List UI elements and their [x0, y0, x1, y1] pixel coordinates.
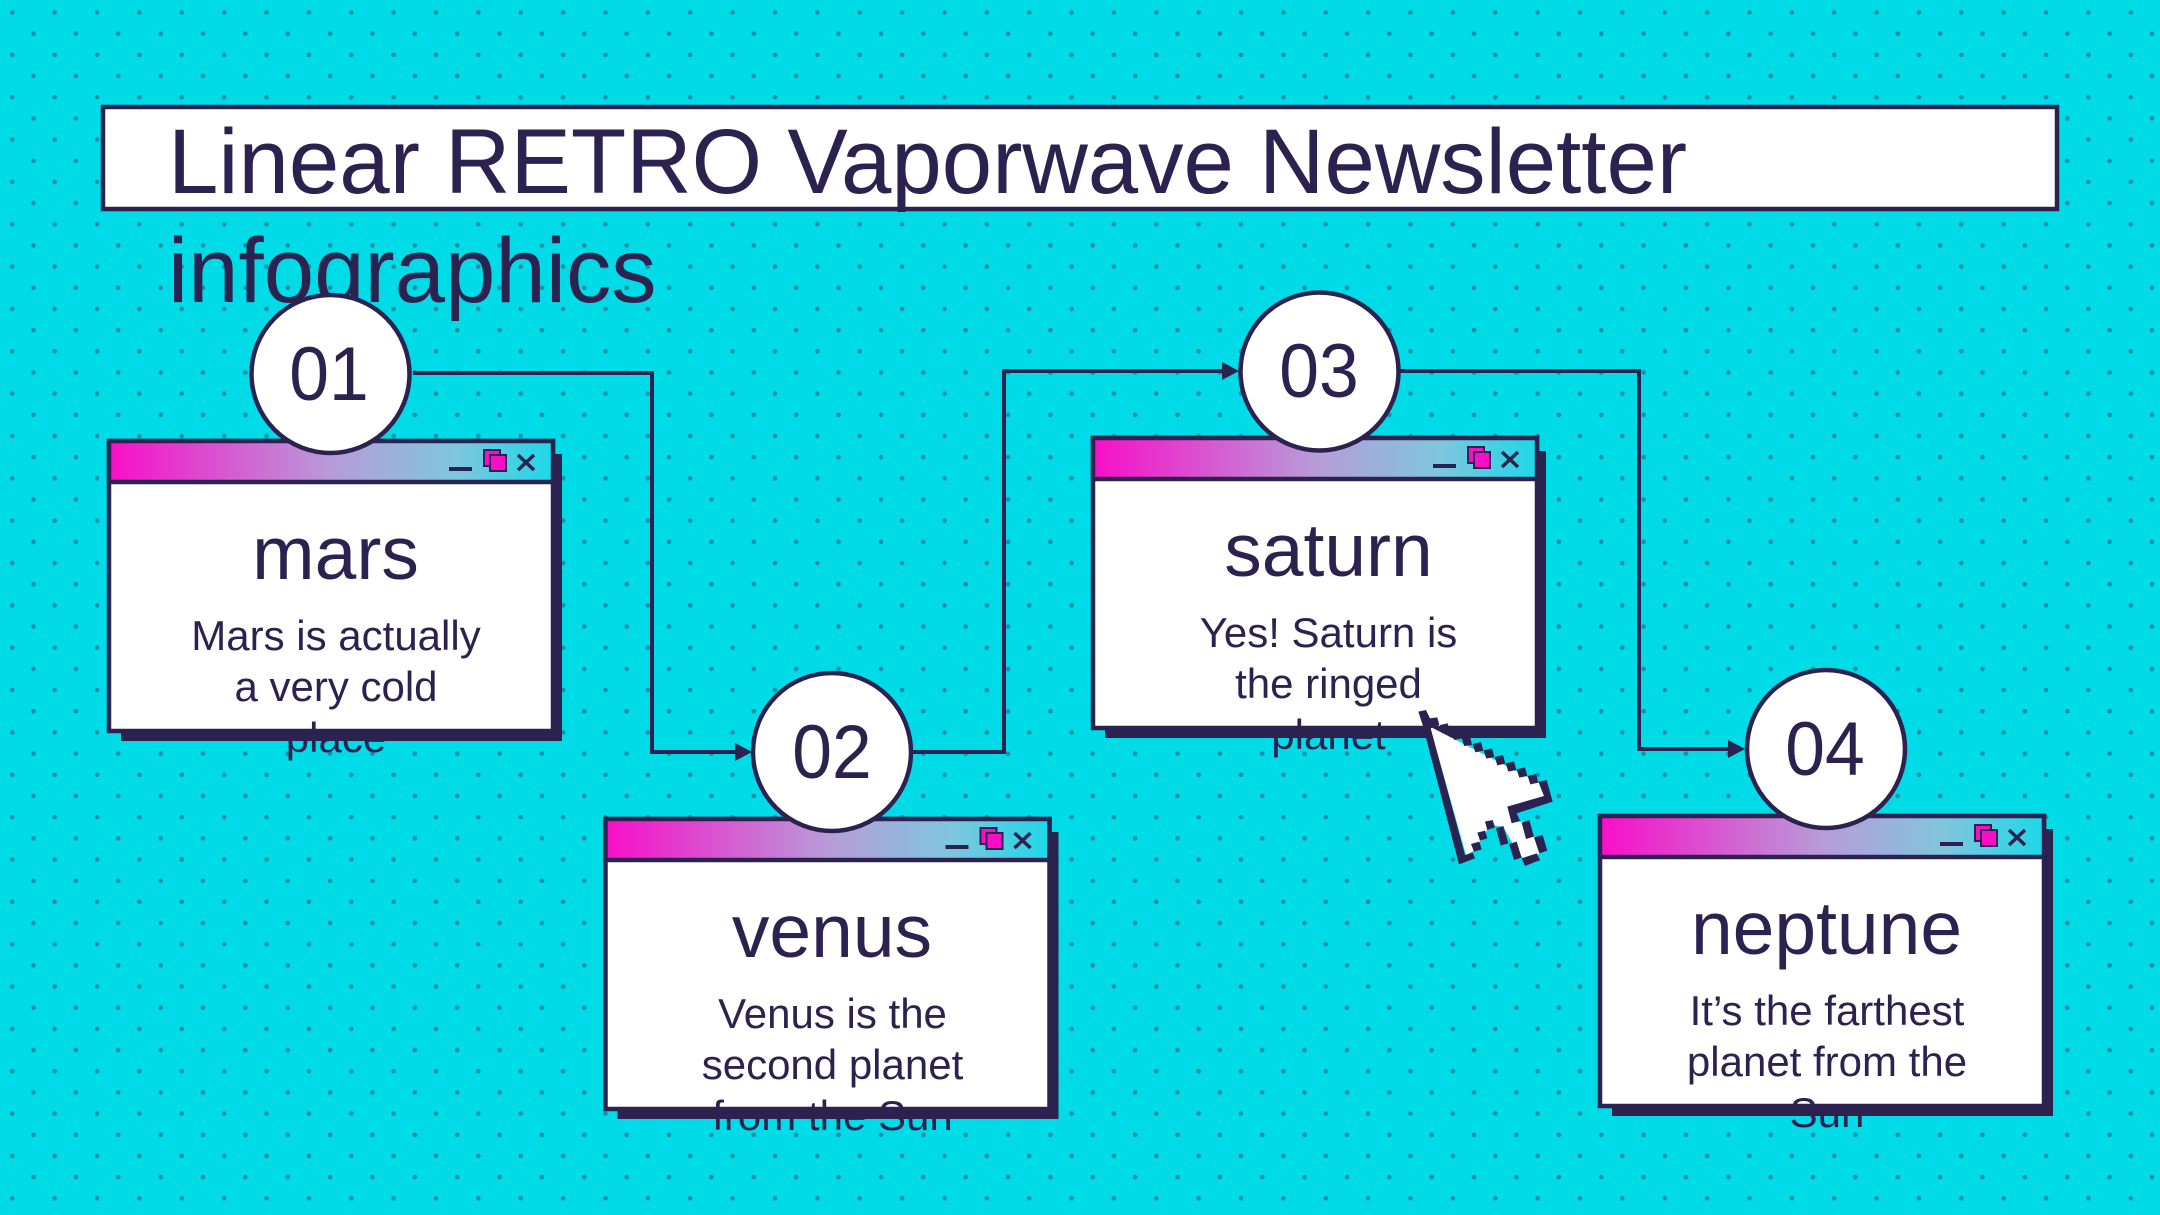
text: neptune description: planet from the	[1687, 1038, 1967, 1085]
window body	[1093, 438, 1537, 728]
number badge 01	[252, 295, 410, 453]
gradient title bar	[606, 819, 1050, 860]
panel: venus window	[606, 819, 1058, 1139]
heading: neptune: neptune	[1691, 886, 1962, 970]
heading: venus: venus	[732, 889, 932, 973]
window controls	[1433, 447, 1518, 468]
text: venus description: from the Sun	[712, 1092, 953, 1139]
text: neptune description: It’s the farthest	[1690, 987, 1964, 1034]
window body	[1600, 816, 2044, 1106]
text: venus description: Venus is the	[718, 990, 947, 1037]
number badge 02: 02	[792, 709, 872, 794]
text: saturn description: planet	[1271, 711, 1386, 758]
text: saturn description: Yes! Saturn is	[1200, 609, 1457, 656]
number badge 04	[1747, 670, 1905, 828]
number badge 04: 04	[1785, 706, 1865, 791]
title box	[103, 107, 2057, 209]
window body	[606, 819, 1050, 1109]
text: mars description: place	[286, 714, 386, 761]
text: venus description: second planet	[702, 1041, 964, 1088]
window controls	[449, 450, 534, 471]
text: saturn description: the ringed	[1235, 660, 1422, 707]
number badge 02	[753, 673, 911, 831]
title: infographics	[168, 219, 657, 322]
text: neptune description: Sun	[1790, 1089, 1864, 1136]
number badge 03: 03	[1279, 328, 1359, 413]
connector: 02 to 03	[912, 362, 1239, 752]
number badge 01: 01	[289, 331, 369, 416]
window controls	[1940, 825, 2025, 846]
window controls	[946, 828, 1030, 849]
connector: 03 to 04	[1399, 371, 1745, 758]
panel: mars window	[109, 441, 562, 761]
window shadow	[1105, 451, 1546, 738]
window body	[109, 441, 553, 731]
heading: saturn: saturn	[1224, 508, 1433, 592]
text: mars description: Mars is actually	[191, 612, 481, 659]
window shadow	[618, 832, 1058, 1119]
window shadow	[1612, 829, 2053, 1116]
title: Linear RETRO Vaporwave Newsletter	[168, 110, 1687, 213]
number badge 03	[1240, 292, 1398, 450]
gradient title bar	[1093, 438, 1537, 479]
connector: 01 to 02	[413, 373, 752, 761]
text: mars description: a very cold	[234, 663, 438, 710]
window shadow	[121, 454, 562, 741]
gradient title bar	[109, 441, 553, 482]
icon: pixel cursor	[1418, 710, 1553, 866]
gradient title bar	[1600, 816, 2044, 857]
panel: saturn window	[1093, 438, 1546, 758]
heading: mars: mars	[252, 511, 419, 595]
panel: neptune window	[1600, 816, 2053, 1136]
